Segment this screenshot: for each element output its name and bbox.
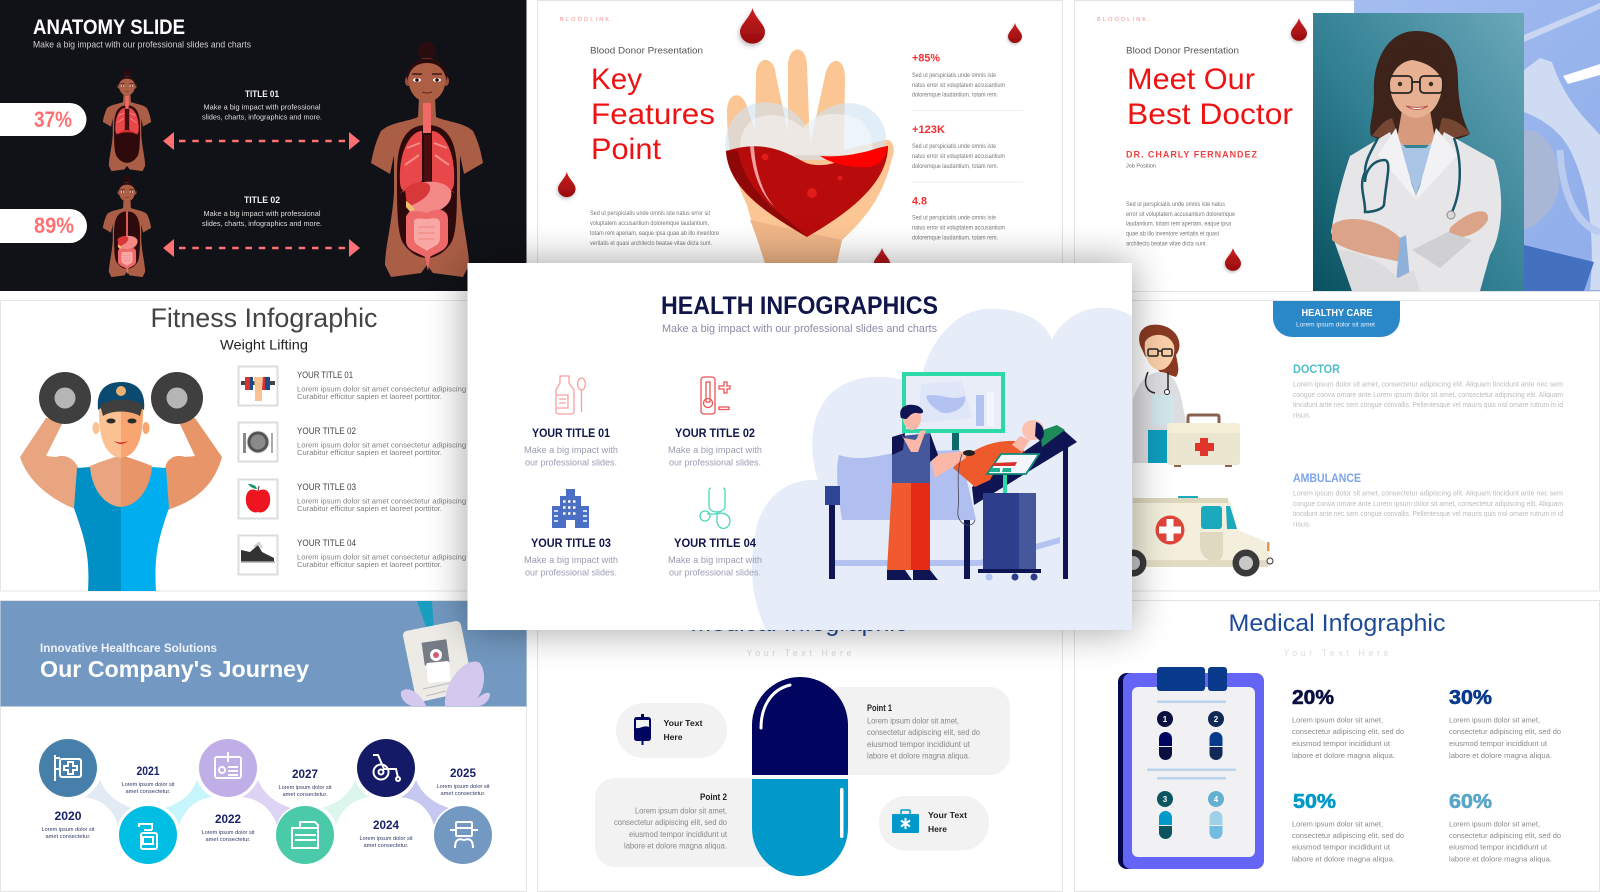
body text: veritatis et quasi architecto beatae vitae dicta sunt. <box>590 241 712 247</box>
body text: Sed ut perspiciatis unde omnis iste natus <box>1126 202 1225 208</box>
stat: +123K: +123K <box>912 124 945 136</box>
heading: anatomy slide: ANATOMY SLIDE <box>33 16 185 39</box>
header band <box>0 601 526 706</box>
icon tile: dumbbell hand <box>238 366 278 406</box>
card: point 1: Point 1 <box>867 703 892 713</box>
milestone: 2027 <box>278 769 332 798</box>
text: ambulance: risus. <box>1293 520 1311 528</box>
stat: 50%: Lorem ipsum dolor sit amet, <box>1292 820 1383 828</box>
text: fitness item 02: Curabitur efficitur sapien et laoreet porttitor. <box>297 450 442 457</box>
text: your title 04: Make a big impact with <box>668 555 762 565</box>
subheading: weight lifting: Weight Lifting <box>220 336 308 352</box>
heading: medical infographic (partly hidden): Medical Infographic <box>690 610 908 637</box>
text: fitness item 02: Lorem ipsum dolor sit amet consectetur adipiscing elit. <box>297 442 480 450</box>
illustration: ID badge with leaves <box>401 601 490 706</box>
icon tile: red apple <box>238 480 278 518</box>
stat: +85%: Sed ut perspiciatis unde omnis iste <box>912 73 997 79</box>
milestone: 2025: 2025 <box>450 768 477 780</box>
icon tile: running shoe <box>238 536 278 574</box>
milestone: 2024 <box>360 820 413 849</box>
pill: IV bag: Your Text <box>664 718 703 728</box>
card: point 2 <box>595 778 785 867</box>
text: your title 01 <box>524 426 618 468</box>
text: fitness item 02 <box>297 426 480 457</box>
photo: teal backdrop <box>1313 13 1524 291</box>
text: title 02: TITLE 02 <box>244 195 280 206</box>
milestone icon: hospital sign <box>39 739 97 797</box>
stat: 4.8: natus error sit voluptatem accusantium <box>912 226 1005 232</box>
body text: voluptatem accusantium doloremque laudantium, <box>590 221 709 227</box>
stat: +85%: natus error sit voluptatem accusantium <box>912 83 1005 89</box>
stat: 20%: eiusmod tempor incididunt ut <box>1292 739 1391 748</box>
heading: meet our best doctor: Best Doctor <box>1127 98 1293 131</box>
background: hospital scanner photo <box>1354 0 1600 291</box>
panel: healthy care <box>1100 300 1600 591</box>
stat: 50%: 50% <box>1293 791 1336 813</box>
pill: medical case: Here <box>928 824 947 834</box>
illustration: ambulance <box>1120 496 1273 576</box>
heading: key features point: Key <box>591 63 642 96</box>
stat: +85% <box>912 52 1005 98</box>
text: your title 01: our professional slides. <box>525 458 617 468</box>
text: title 01 <box>202 89 322 122</box>
text: title 01: slides, charts, infographics and more. <box>202 112 322 122</box>
stat: 60%: eiusmod tempor incididunt ut <box>1449 842 1548 852</box>
text: your title 03: our professional slides. <box>525 568 617 578</box>
icon: blood drops <box>1225 18 1307 271</box>
heading: fitness infographic: Fitness Infographic <box>150 303 378 333</box>
text: fitness item 02: YOUR TITLE 02 <box>297 426 356 436</box>
illustration: weightlifter <box>20 372 222 591</box>
stat: +123K: natus error sit voluptatem accusantium <box>912 154 1005 160</box>
stat: 30%: labore et dolore magna aliqua. <box>1449 751 1552 760</box>
card: point 1: consectetur adipiscing elit, sed do <box>867 728 981 737</box>
text: ambulance: congue conva ornare ante Lorem ipsum dolor sit amet, consectetur adipiscing elit. Aliquam <box>1293 499 1563 508</box>
illustration: ultrasound scene <box>825 374 1077 580</box>
milestone: 2024: Lorem ipsum dolor sit <box>360 836 413 842</box>
stat: 50%: eiusmod tempor incididunt ut <box>1292 842 1391 852</box>
text: your title 02: our professional slides. <box>669 458 761 468</box>
icon: medicine bottle and spoon <box>556 376 585 414</box>
milestone: 2025 <box>436 768 490 797</box>
stat: +123K <box>912 124 1005 170</box>
milestone icon: sanitizer bottle <box>119 806 177 864</box>
stat: +85%: doloremque laudantium, totam rem. <box>912 92 998 98</box>
stat pill: 37%: 37% <box>34 107 72 132</box>
text: fitness item 01: YOUR TITLE 01 <box>297 370 353 380</box>
text: fitness item 04 <box>297 538 480 569</box>
milestone: 2021: amet consectetur. <box>126 789 171 795</box>
text: fitness item 04: Lorem ipsum dolor sit amet consectetur adipiscing elit. <box>297 554 480 562</box>
text: fitness item 03 <box>297 482 480 513</box>
stat: 60%: consectetur adipiscing elit, sed do <box>1449 831 1561 840</box>
text: your title 01: YOUR TITLE 01 <box>532 426 610 440</box>
brand label: BLOODLINK. <box>1097 17 1152 23</box>
tab: healthy care: Lorem ipsum dolor sit amet <box>1296 322 1375 328</box>
stat: 50%: consectetur adipiscing elit, sed do <box>1292 831 1404 840</box>
panel: company journey <box>0 600 526 892</box>
milestone icon: wheelchair <box>357 739 415 797</box>
card: point 1 <box>820 687 1010 775</box>
text: ambulance <box>1293 471 1563 528</box>
eyebrow: Innovative Healthcare Solutions <box>40 643 217 655</box>
text: your title 02 <box>668 426 762 468</box>
card: point 1: labore et dolore magna aliqua. <box>867 752 970 760</box>
illustration: nurse with first aid kit <box>1133 325 1240 467</box>
icon: stethoscope <box>700 488 730 528</box>
connectors: timeline ribbons <box>84 780 449 825</box>
text: your title 04 <box>668 536 762 578</box>
text: doctor: DOCTOR <box>1293 362 1340 376</box>
text: doctor: tincidunt ante nec sem congue convallis. Pellentesque vel mauris quis nisl ornare rutrum in id <box>1293 400 1563 409</box>
milestone: 2021: Lorem ipsum dolor sit <box>122 782 175 788</box>
text: your title 01: Make a big impact with <box>524 445 618 455</box>
brand label: BLOODLINK. <box>560 17 615 23</box>
pill: IV bag <box>616 703 727 758</box>
stat: 20% <box>1292 687 1404 760</box>
stat: 50% <box>1292 791 1404 864</box>
milestone: 2022: 2022 <box>215 814 241 826</box>
pill: medical case <box>879 796 989 850</box>
stat: 30%: eiusmod tempor incididunt ut <box>1449 739 1548 748</box>
panel: health infographics (center) <box>468 263 1132 630</box>
milestone: 2024: amet consectetur. <box>364 843 409 849</box>
milestone: 2020 <box>42 811 95 840</box>
text: title 02: Make a big impact with professional <box>204 209 321 218</box>
icon tile: plate and cutlery <box>238 422 278 462</box>
text: ambulance: AMBULANCE <box>1293 471 1361 485</box>
milestone: 2027: amet consectetur. <box>282 792 328 798</box>
heading: medical infographic: Medical Infographic <box>1228 610 1446 637</box>
text: title 02 <box>202 195 322 228</box>
eyebrow: Blood Donor Presentation <box>590 46 703 56</box>
stat: 20%: 20% <box>1292 687 1334 709</box>
stat: 60%: 60% <box>1449 791 1492 813</box>
body text <box>590 211 720 247</box>
body text <box>1126 202 1236 248</box>
milestone: 2027: 2027 <box>292 769 318 781</box>
stat pill: 37% <box>0 103 86 136</box>
text: title 01: Make a big impact with professional <box>204 102 321 112</box>
body text: architecto beatae vitae dicta sunt. <box>1126 242 1207 248</box>
heading: key features point: Point <box>591 133 662 166</box>
eyebrow: Blood Donor Presentation <box>1126 46 1239 56</box>
stat pill: 89% <box>0 209 87 243</box>
subtitle: Make a big impact with our professional slides and charts <box>662 323 937 335</box>
subtitle: Your Text Here <box>1284 648 1388 658</box>
background cloud <box>752 308 1132 630</box>
card: point 2: Point 2 <box>700 792 727 802</box>
large anatomy figure <box>371 42 483 277</box>
photo: smiling doctor <box>1331 31 1501 291</box>
panel: key features point <box>538 0 1062 292</box>
text: fitness item 03: Curabitur efficitur sapien et laoreet porttitor. <box>297 506 442 513</box>
heading: key features point: Features <box>591 98 715 131</box>
body text: totam rem aperiam, eaque ipsa quae ab illo inventore <box>590 231 720 237</box>
milestone: 2020: 2020 <box>54 811 82 823</box>
text: your title 02: Make a big impact with <box>668 445 762 455</box>
tab: healthy care <box>1273 301 1400 337</box>
icon: thermometer <box>701 377 730 414</box>
milestone: 2022: Lorem ipsum dolor sit <box>202 830 255 836</box>
stat: 20%: labore et dolore magna aliqua. <box>1292 751 1395 760</box>
stat: 20%: Lorem ipsum dolor sit amet, <box>1292 716 1383 724</box>
card: point 2: Lorem ipsum dolor sit amet, <box>635 806 727 816</box>
text: title 01: TITLE 01 <box>245 89 280 100</box>
milestone: 2020: amet consectetur. <box>46 834 91 840</box>
stat: 4.8: Sed ut perspiciatis unde omnis iste <box>912 216 997 222</box>
stat: +85%: +85% <box>912 52 940 64</box>
text: doctor <box>1293 362 1563 420</box>
panel: anatomy slide <box>0 0 526 291</box>
body text: error sit voluptatem accusantium doloremque <box>1126 212 1236 218</box>
stat: 60%: labore et dolore magna aliqua. <box>1449 854 1552 864</box>
text: fitness item 01 <box>297 370 480 401</box>
job position: Job Position <box>1126 164 1156 170</box>
milestone: 2021 <box>122 766 175 795</box>
milestone: 2022 <box>202 814 255 843</box>
stat: 60%: Lorem ipsum dolor sit amet, <box>1449 820 1540 828</box>
body text: laudantium, totam rem aperiam, eaque ipsa <box>1126 222 1232 228</box>
stat: 30%: Lorem ipsum dolor sit amet, <box>1449 716 1540 724</box>
small body with digestive system <box>103 176 151 277</box>
heading: key features point <box>591 63 715 166</box>
text: your title 03 <box>524 536 618 578</box>
doctor name: DR. CHARLY FERNANDEZ <box>1126 150 1258 160</box>
text: your title 02: YOUR TITLE 02 <box>675 426 755 440</box>
text: your title 04: our professional slides. <box>669 568 761 578</box>
stat: 50%: labore et dolore magna aliqua. <box>1292 854 1395 864</box>
panel: fitness infographic <box>0 300 500 591</box>
text: fitness item 03: YOUR TITLE 03 <box>297 482 356 492</box>
card: point 1: eiusmod tempor incididunt ut <box>867 740 971 749</box>
milestone: 2021: 2021 <box>136 766 160 778</box>
text: doctor: risus. <box>1293 410 1311 420</box>
milestone: 2025: Lorem ipsum dolor sit <box>436 784 490 790</box>
text: doctor: congue conva ornare ante Lorem ipsum dolor sit amet, consectetur adipiscing elit. Aliquam <box>1293 390 1563 399</box>
panel: medical capsule <box>538 600 1062 892</box>
milestone icon: printer document <box>276 806 334 864</box>
illustration: clipboard with capsules <box>1118 667 1264 869</box>
text: fitness item 03: Lorem ipsum dolor sit amet consectetur adipiscing elit. <box>297 498 480 506</box>
illustration: clipboard with capsules: 2 <box>1214 715 1219 724</box>
pill: medical case: Your Text <box>928 810 967 820</box>
card: point 2: labore et dolore magna aliqua. <box>624 842 727 850</box>
stat: 4.8: doloremque laudantium, totam rem. <box>912 236 998 242</box>
illustration: hand holding glass heart <box>725 50 894 263</box>
text: title 02: slides, charts, infographics and more. <box>202 219 322 228</box>
milestone: 2024: 2024 <box>373 820 400 832</box>
text: fitness item 01: Curabitur efficitur sapien et laoreet porttitor. <box>297 394 442 401</box>
milestone: 2022: amet consectetur. <box>206 837 251 843</box>
stat: 30%: consectetur adipiscing elit, sed do <box>1449 727 1561 736</box>
tab: healthy care: HEALTHY CARE <box>1302 308 1373 319</box>
stat: 4.8: 4.8 <box>912 196 927 208</box>
stat: 30% <box>1449 687 1561 760</box>
illustration: clipboard with capsules: 3 <box>1163 795 1168 804</box>
heading: our company's journey: Our Company's Journey <box>40 656 309 682</box>
pill: IV bag: Here <box>664 732 683 742</box>
text: ambulance: Lorem ipsum dolor sit amet, consectetur adipiscing elit. Aliquam tincidunt ante nec sem <box>1293 488 1563 498</box>
card: point 2: consectetur adipiscing elit, sed do <box>614 818 728 827</box>
card: point 1: Lorem ipsum dolor sit amet, <box>867 716 959 726</box>
text: fitness item 04: Curabitur efficitur sapien et laoreet porttitor. <box>297 562 442 569</box>
heading: health infographics: HEALTH INFOGRAPHICS <box>661 292 938 320</box>
milestone icon: medical robot <box>434 806 492 864</box>
stat: 4.8 <box>912 196 1005 242</box>
illustration: clipboard with capsules: 4 <box>1214 795 1219 804</box>
text: doctor: Lorem ipsum dolor sit amet, consectetur adipiscing elit. Aliquam tincidunt ante nec sem <box>1293 380 1563 388</box>
text: your title 04: YOUR TITLE 04 <box>674 536 756 550</box>
milestone: 2025: amet consectetur. <box>440 791 486 797</box>
stat pill: 89%: 89% <box>34 213 74 238</box>
text: fitness item 01: Lorem ipsum dolor sit amet consectetur adipiscing elit. <box>297 386 480 394</box>
milestone: 2027: Lorem ipsum dolor sit <box>278 785 332 791</box>
body text: quae ab illo inventore veritatis et quasi <box>1126 232 1219 238</box>
stat: 20%: consectetur adipiscing elit, sed do <box>1292 727 1404 736</box>
subtitle: Your Text Here <box>746 648 852 658</box>
stat: 30%: 30% <box>1449 687 1492 709</box>
small body with lungs <box>103 70 151 171</box>
milestone: 2020: Lorem ipsum dolor sit <box>42 827 95 833</box>
text: your title 03: YOUR TITLE 03 <box>531 536 611 550</box>
panel: meet our best doctor <box>1074 0 1600 292</box>
text: ambulance: tincidunt ante nec sem congue convallis. Pellentesque vel mauris quis nisl ornare rutrum in id <box>1293 509 1563 518</box>
text: your title 03: Make a big impact with <box>524 555 618 565</box>
card: point 2: eiusmod tempor incididunt ut <box>629 830 728 839</box>
arrow: double-headed top <box>163 132 360 150</box>
subtitle: anatomy slide: Make a big impact with our professional slides and charts <box>33 40 251 50</box>
stat: 60% <box>1449 791 1561 864</box>
capsule illustration <box>752 677 848 876</box>
stat: +123K: Sed ut perspiciatis unde omnis iste <box>912 144 997 150</box>
panel: medical infographic <box>1074 600 1600 892</box>
heading: meet our best doctor: Meet Our <box>1127 63 1255 96</box>
icon: blood drops <box>558 8 1022 271</box>
icon: hospital building <box>552 489 589 528</box>
milestone icon: ID card <box>199 739 257 797</box>
stat: +123K: doloremque laudantium, totam rem. <box>912 164 998 170</box>
arrow: double-headed bottom <box>163 239 360 257</box>
illustration: clipboard with capsules: 1 <box>1163 715 1168 724</box>
heading: meet our best doctor <box>1127 63 1293 131</box>
body text: Sed ut perspiciatis unde omnis iste natus error sit <box>590 211 710 217</box>
text: fitness item 04: YOUR TITLE 04 <box>297 538 356 548</box>
